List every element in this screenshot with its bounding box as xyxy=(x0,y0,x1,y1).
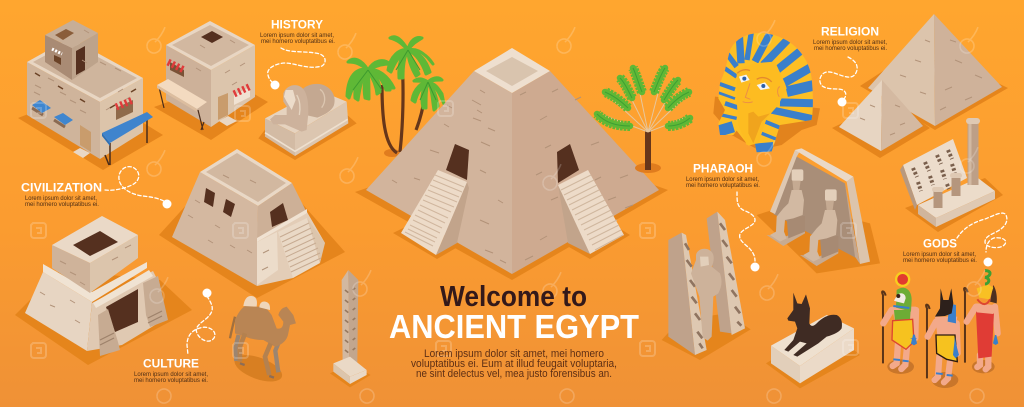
anubis statue xyxy=(766,293,860,388)
building: stepped pyramid house xyxy=(159,149,345,298)
label: pharaoh: PHARAOH xyxy=(693,162,753,176)
gods xyxy=(882,271,998,388)
title description: Lorem ipsum dolor sit amet, mei homero xyxy=(424,348,604,360)
title xyxy=(389,281,639,345)
label: religion: mei homero voluptatibus ei. xyxy=(814,45,887,52)
label: culture xyxy=(134,356,208,384)
building: shop house xyxy=(154,21,268,140)
dashed connector: gods xyxy=(957,213,1007,252)
label: civilization xyxy=(21,180,102,208)
marker: civilization xyxy=(162,200,172,208)
label: gods xyxy=(903,236,977,264)
label: gods: Lorem ipsum dolor sit amet, xyxy=(903,251,976,258)
label: history xyxy=(260,18,335,45)
label: civilization: mei homero voluptatibus ei. xyxy=(25,201,99,208)
label: history: mei homero voluptatibus ei. xyxy=(261,38,335,45)
building: market house xyxy=(18,20,163,170)
label: history: HISTORY xyxy=(271,18,323,32)
dashed connector: history xyxy=(268,48,325,85)
label: civilization: Lorem ipsum dolor sit amet, xyxy=(25,195,97,202)
tablet with columns xyxy=(900,118,1003,232)
pyramids xyxy=(832,14,1008,158)
title: ANCIENT EGYPT xyxy=(389,308,639,345)
label: religion xyxy=(813,24,887,52)
obelisk xyxy=(330,270,371,387)
fan palm tree xyxy=(597,68,690,173)
temple with seated statues xyxy=(757,148,880,273)
marker: pharaoh xyxy=(750,262,760,272)
watermark squares xyxy=(31,101,858,358)
building: temple with entrance xyxy=(15,216,192,365)
camel xyxy=(230,296,296,387)
title description: ne sint delectus vel, mea justo forensibus an. xyxy=(416,368,612,380)
title: Welcome to xyxy=(440,281,587,313)
marker: history xyxy=(270,80,280,90)
carved wall with figure xyxy=(662,212,751,360)
title description xyxy=(411,348,617,380)
title description: voluptatibus ei. Eum at illud feugait voluptaria, xyxy=(411,358,617,370)
label: religion: RELIGION xyxy=(821,24,879,38)
label: pharaoh: mei homero voluptatibus ei. xyxy=(686,182,760,189)
label: history: Lorem ipsum dolor sit amet, xyxy=(260,32,334,39)
dashed connector: culture xyxy=(187,296,215,355)
label: pharaoh: Lorem ipsum dolor sit amet, xyxy=(686,176,759,183)
pharaoh mask xyxy=(713,30,820,152)
label: gods: mei homero voluptatibus ei. xyxy=(903,257,977,264)
palm trees xyxy=(347,37,444,157)
label: culture: CULTURE xyxy=(143,356,199,370)
dashed connector: civilization xyxy=(105,167,167,203)
label: civilization: CIVILIZATION xyxy=(21,180,102,194)
great pyramid xyxy=(355,48,668,280)
sphinx statue xyxy=(258,84,357,160)
label: culture: Lorem ipsum dolor sit amet, xyxy=(134,371,208,378)
label: culture: mei homero voluptatibus ei. xyxy=(134,377,208,384)
marker: religion xyxy=(838,98,846,106)
watermark marks xyxy=(147,20,985,403)
label: religion: Lorem ipsum dolor sit amet, xyxy=(813,39,887,46)
label: gods: GODS xyxy=(923,236,957,250)
dashed connector: pharaoh xyxy=(737,192,755,261)
marker: culture xyxy=(202,288,212,298)
dashed connector: religion xyxy=(820,57,857,99)
label: pharaoh xyxy=(686,162,760,189)
marker: gods xyxy=(984,258,992,266)
